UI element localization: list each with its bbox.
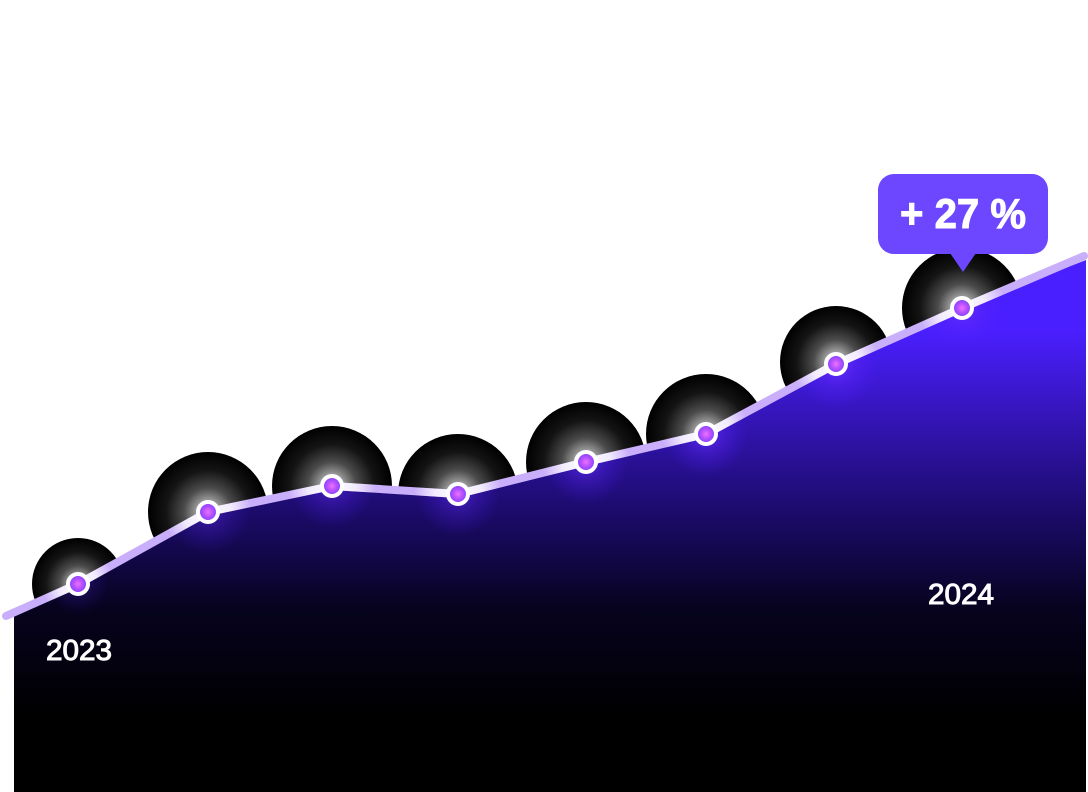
data point markers <box>68 298 972 594</box>
trend line <box>6 256 1084 620</box>
growth chart infographic <box>2 174 1088 792</box>
area under the line <box>14 260 1086 792</box>
black radial halos behind data points <box>32 248 1022 630</box>
label: 2023: 2023 <box>46 635 112 667</box>
label: 2024: 2024 <box>928 579 994 611</box>
callout: +27% <box>878 174 1048 272</box>
callout: +27%: + 27 % <box>900 190 1026 237</box>
